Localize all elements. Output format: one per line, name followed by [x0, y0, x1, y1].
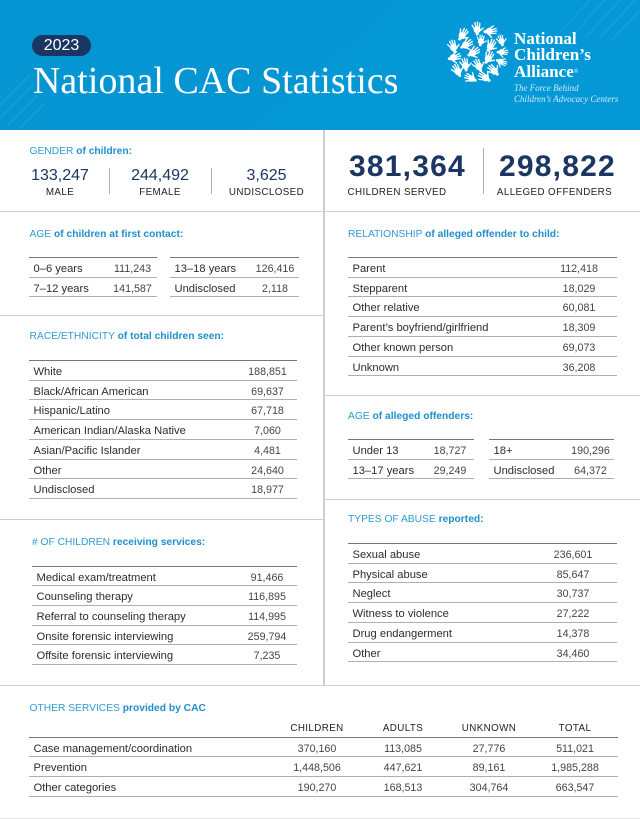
table: relationship: Other known person	[352, 342, 453, 354]
table: relationship: Parent’s boyfriend/girlfriend	[352, 322, 488, 334]
male	[31, 167, 89, 198]
table: race: Other	[34, 465, 61, 477]
table: relationship	[348, 257, 617, 376]
table: race: American Indian/Alaska Native	[34, 425, 186, 437]
table: other services: Other categories	[34, 782, 116, 794]
table: services: 116,895	[248, 591, 286, 603]
table: other services: 1,985,288	[551, 762, 599, 774]
table: abuse: 30,737	[557, 588, 589, 600]
table: race	[29, 360, 297, 499]
table: services: 7,235	[254, 650, 280, 662]
logo name: National	[514, 28, 577, 48]
header banner	[0, 0, 640, 130]
table: services: Onsite forensic interviewing	[36, 631, 173, 643]
table: age of children, right: 126,416	[256, 263, 294, 275]
heading: age of children: AGE of children at first contact:	[30, 228, 183, 240]
table: age of children, left: 7–12 years	[34, 283, 89, 295]
table: other services column headers: TOTAL	[559, 723, 591, 734]
table: other services: Case management/coordination	[34, 742, 192, 754]
table: offender age, right	[489, 439, 614, 479]
table: abuse: Physical abuse	[352, 569, 428, 581]
table: relationship: Other relative	[352, 302, 420, 314]
table: race: 69,637	[251, 386, 284, 398]
table: other services: 663,547	[556, 782, 594, 794]
stat: children served: 381,364	[349, 150, 466, 183]
table: other services column headers: CHILDREN	[290, 723, 344, 734]
logo name: Children’s	[514, 45, 591, 64]
table: abuse: Witness to violence	[352, 608, 449, 620]
table: other services column headers: ADULTS	[383, 723, 423, 734]
table: offender age, left: 18,727	[434, 445, 466, 457]
table: race: Undisclosed	[34, 484, 94, 496]
table: abuse: 14,378	[557, 628, 589, 640]
table: relationship: 36,208	[563, 362, 595, 374]
male: MALE	[46, 186, 74, 198]
table: age of children, right: Undisclosed	[174, 283, 235, 295]
stat: alleged offenders: ALLEGED OFFENDERS	[497, 186, 612, 198]
year badge: 2023	[44, 36, 79, 54]
table: services: 91,466	[251, 572, 283, 584]
logo name	[514, 28, 591, 81]
table: abuse: 85,647	[557, 569, 589, 581]
table: age of children, right	[170, 257, 299, 297]
table: race: 7,060	[254, 425, 281, 437]
table: offender age, left: Under 13	[352, 445, 399, 457]
heading: race: RACE/ETHNICITY of total children seen:	[30, 330, 224, 342]
table: abuse: 236,601	[554, 549, 592, 561]
table: relationship: 60,081	[563, 302, 595, 314]
table: other services: 1,448,506	[293, 762, 341, 774]
female: 244,492	[131, 167, 189, 184]
table: abuse: 34,460	[557, 648, 589, 660]
table: relationship: Stepparent	[352, 283, 407, 295]
heading: services: # OF CHILDREN receiving services:	[32, 536, 205, 548]
table: offender age, right: 64,372	[574, 465, 607, 477]
table: offender age, left: 13–17 years	[352, 465, 414, 477]
table: other services column headers: UNKNOWN	[462, 723, 516, 734]
table: other services: 89,161	[473, 762, 505, 774]
undisclosed: UNDISCLOSED	[229, 186, 304, 198]
table: abuse: Sexual abuse	[352, 549, 420, 561]
heading: age of offenders: AGE of alleged offenders:	[348, 410, 473, 422]
table: age of children, right: 13–18 years	[174, 263, 236, 275]
table: relationship: Unknown	[352, 362, 399, 374]
table: services: Medical exam/treatment	[36, 572, 156, 584]
female: FEMALE	[139, 186, 181, 198]
table: services	[32, 566, 297, 665]
table: relationship: 112,418	[560, 263, 598, 275]
icon: circle of hands	[446, 22, 509, 82]
table: age of children, left: 0–6 years	[34, 263, 83, 275]
table: other services	[29, 736, 618, 797]
table: abuse: 27,222	[557, 608, 589, 620]
table: offender age, right: 18+	[494, 445, 512, 457]
stat: alleged offenders: 298,822	[499, 150, 616, 183]
heading: gender: GENDER of children:	[30, 146, 132, 156]
table: race: Asian/Pacific Islander	[34, 445, 140, 457]
table: other services: 113,085	[384, 742, 422, 754]
heading: types of abuse: TYPES OF ABUSE reported:	[348, 514, 484, 525]
male: 133,247	[31, 167, 89, 184]
stat: children served: CHILDREN SERVED	[348, 186, 446, 198]
table: abuse: Other	[352, 648, 380, 660]
table: relationship: Parent	[352, 263, 385, 275]
table: abuse: Neglect	[352, 588, 390, 600]
stat: children served	[348, 150, 466, 198]
logo tagline: Children’s Advocacy Centers	[514, 94, 618, 104]
table: abuse	[348, 543, 617, 662]
gender stats	[31, 167, 304, 198]
table: offender age, left: 29,249	[434, 465, 466, 477]
logo tagline: The Force Behind	[514, 83, 579, 93]
table: offender age, left	[348, 439, 474, 479]
table: other services: 27,776	[473, 742, 505, 754]
table: other services: 168,513	[384, 782, 422, 794]
table: age of children, left: 141,587	[113, 283, 152, 295]
table: race: 188,851	[248, 366, 287, 378]
table: services: Offsite forensic interviewing	[36, 650, 173, 662]
table: age of children, left	[29, 257, 157, 297]
undisclosed: 3,625	[246, 167, 287, 184]
logo name: Alliance®	[514, 62, 578, 81]
table: relationship: 18,029	[563, 283, 595, 295]
table: services: Counseling therapy	[36, 591, 133, 603]
logo tagline	[514, 83, 618, 104]
table: offender age, right: 190,296	[571, 445, 610, 457]
table: other services column headers	[290, 723, 591, 734]
table: age of children, right: 2,118	[262, 283, 288, 295]
table: race: 24,640	[251, 465, 284, 477]
heading: other services: OTHER SERVICES provided by CAC	[30, 703, 206, 714]
table: race: 18,977	[251, 484, 284, 496]
table: race: Black/African American	[34, 386, 149, 398]
table: race: 4,481	[254, 445, 281, 457]
table: services: 114,995	[248, 611, 286, 623]
logo	[446, 22, 618, 104]
undisclosed	[229, 167, 304, 198]
table: relationship: 69,073	[563, 342, 595, 354]
table: other services: 447,621	[384, 762, 422, 774]
table: other services: 370,160	[298, 742, 336, 754]
stat: alleged offenders	[496, 150, 616, 198]
table: age of children, left: 111,243	[114, 263, 151, 275]
table: abuse: Drug endangerment	[352, 628, 452, 640]
table: other services: 190,270	[298, 782, 336, 794]
year badge	[32, 34, 91, 56]
table: offender age, right: Undisclosed	[494, 465, 554, 477]
heading: relationship: RELATIONSHIP of alleged offender to child:	[348, 228, 560, 240]
table: services: Referral to counseling therapy	[36, 611, 186, 623]
table: race: 67,718	[251, 405, 284, 417]
table: race: Hispanic/Latino	[34, 405, 110, 417]
table: services: 259,794	[248, 631, 286, 643]
female	[131, 167, 189, 198]
table: race: White	[34, 366, 62, 378]
table: relationship: 18,309	[563, 322, 595, 334]
title: National CAC Statistics	[33, 60, 399, 102]
table: other services: 511,021	[556, 742, 594, 754]
table: other services: Prevention	[34, 762, 87, 774]
table: other services: 304,764	[470, 782, 508, 794]
